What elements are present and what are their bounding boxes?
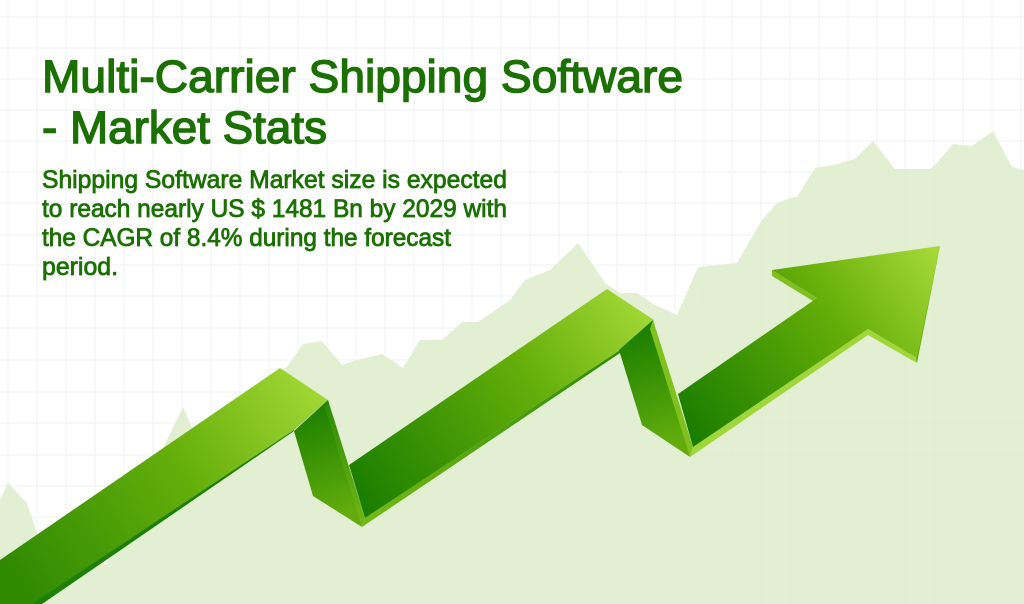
description text: period.	[42, 253, 118, 281]
description text: to reach nearly US $ 1481 Bn by 2029 with	[42, 195, 507, 223]
arrow right edge	[916, 246, 940, 363]
arrow back barb rim	[772, 270, 817, 301]
segment 1 underside	[30, 428, 294, 604]
description text	[42, 166, 507, 281]
segment 2 rim	[362, 350, 620, 527]
lower shaft and head rim	[690, 329, 917, 457]
growth arrow	[0, 246, 940, 604]
title	[42, 51, 683, 153]
fold 2	[619, 320, 690, 457]
segment 2	[349, 289, 654, 518]
description text: Shipping Software Market size is expected	[42, 166, 507, 194]
description text: the CAGR of 8.4% during the forecast	[42, 224, 451, 252]
fold 1 rim	[325, 400, 365, 527]
title: Multi-Carrier Shipping Software	[42, 51, 683, 102]
segment 1 top face	[0, 368, 328, 604]
fold 1	[294, 400, 362, 527]
faint grid over silhouette	[100, 135, 1024, 604]
fold 2 rim	[650, 320, 693, 457]
background market silhouette	[0, 131, 1024, 604]
arrow head and shaft	[678, 246, 940, 447]
title: - Market Stats	[42, 102, 327, 153]
